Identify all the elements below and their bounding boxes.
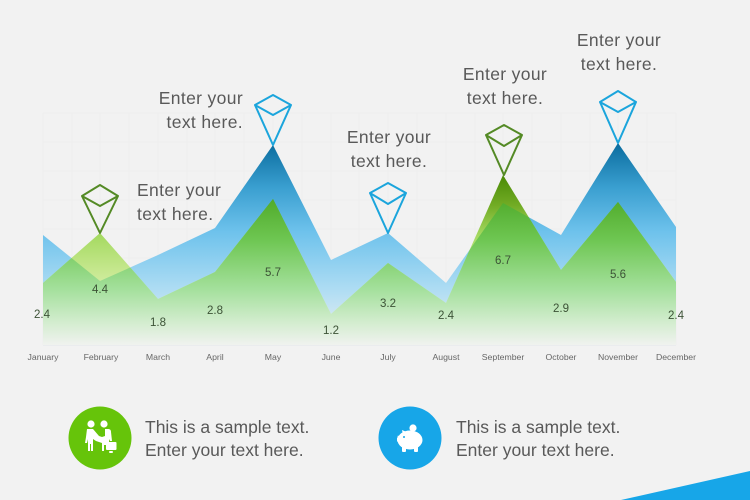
- data values: 1.8: [150, 317, 166, 329]
- month axis labels: June: [322, 352, 341, 362]
- data values: 2.8: [207, 305, 223, 317]
- callout: July: text here.: [351, 151, 427, 171]
- text block: second note: This is a sample text.: [456, 417, 620, 437]
- text block: first note: Enter your text here.: [145, 440, 304, 460]
- data values: 6.7: [495, 255, 511, 267]
- lime area series: [43, 175, 676, 345]
- icon: handshake: [68, 406, 132, 470]
- month axis labels: May: [265, 352, 282, 362]
- callout: February: Enter your: [137, 180, 221, 200]
- callout: September: text here.: [467, 88, 543, 108]
- marker: May: [255, 95, 291, 145]
- data values: 2.4: [668, 310, 685, 322]
- data values: 2.9: [553, 303, 569, 315]
- data values: [34, 255, 685, 337]
- marker: July: [370, 183, 406, 233]
- month axis labels: August: [432, 352, 460, 362]
- month axis labels: December: [656, 352, 696, 362]
- text block: first note: This is a sample text.: [145, 417, 309, 437]
- month axis labels: January: [28, 352, 59, 362]
- month axis labels: March: [146, 352, 170, 362]
- callout: May: Enter your: [159, 88, 243, 108]
- month axis labels: July: [380, 352, 396, 362]
- area chart: [43, 143, 676, 345]
- blue area series: [43, 143, 676, 345]
- icon: piggy bank: [378, 406, 442, 470]
- data values: 1.2: [323, 325, 339, 337]
- marker: February: [82, 185, 118, 233]
- month axis labels: September: [482, 352, 524, 362]
- marker: November: [600, 91, 636, 143]
- month axis labels: February: [84, 352, 119, 362]
- data values: 2.4: [34, 309, 51, 321]
- data values: 5.7: [265, 267, 281, 279]
- callout: November: text here.: [581, 54, 657, 74]
- month axis labels: October: [546, 352, 577, 362]
- month axis labels: November: [598, 352, 638, 362]
- chart grid: [43, 113, 676, 345]
- marker: September: [486, 125, 522, 175]
- text block: second note: Enter your text here.: [456, 440, 615, 460]
- data values: 5.6: [610, 269, 626, 281]
- callout: September: Enter your: [463, 64, 547, 84]
- data values: 4.4: [92, 284, 109, 296]
- data values: 2.4: [438, 310, 455, 322]
- data values: 3.2: [380, 298, 396, 310]
- green overlap of series: [43, 199, 676, 338]
- callout: July: Enter your: [347, 127, 431, 147]
- month axis labels: April: [206, 352, 224, 362]
- callout: November: Enter your: [577, 30, 661, 50]
- callout: May: text here.: [167, 112, 243, 132]
- month axis labels: [28, 352, 696, 362]
- callout: February: text here.: [137, 204, 213, 224]
- corner accent: [621, 471, 750, 500]
